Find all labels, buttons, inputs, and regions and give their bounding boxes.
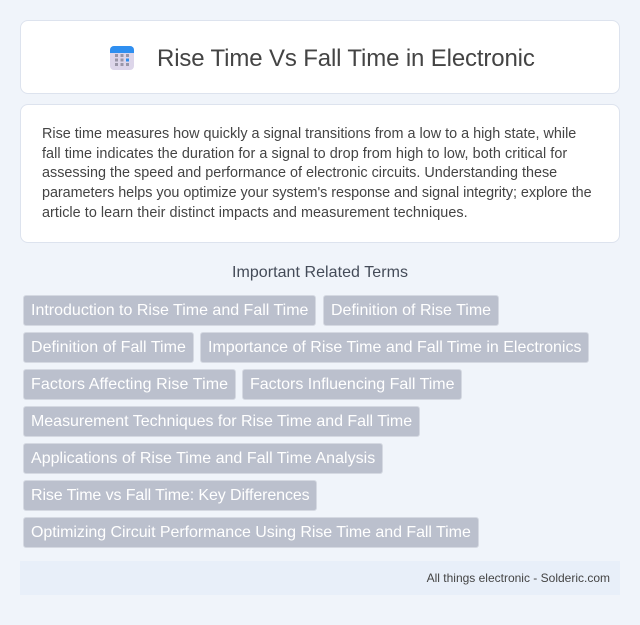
header panel (20, 20, 620, 94)
tag list (23, 295, 589, 548)
tag list: Importance of Rise Time and Fall Time in Electronics (208, 339, 581, 356)
footer bar (20, 561, 620, 595)
tag list: Factors Affecting Rise Time (31, 376, 228, 393)
intro text: fall time indicates the duration for a signal to drop from high to low, both critical for (42, 146, 567, 162)
intro text (42, 126, 592, 221)
intro text: assessing the speed and performance of electronic circuits. Understanding these (42, 165, 557, 181)
intro panel (20, 104, 620, 243)
footer bar: All things electronic - Solderic.com (427, 571, 610, 585)
tag list: Applications of Rise Time and Fall Time Analysis (31, 450, 375, 467)
tag list: Introduction to Rise Time and Fall Time (31, 302, 308, 319)
tag list: Rise Time vs Fall Time: Key Differences (31, 487, 310, 504)
tag list: Optimizing Circuit Performance Using Rise Time and Fall Time (31, 524, 471, 541)
tag list: Definition of Rise Time (331, 302, 491, 319)
icon: calendar (110, 46, 134, 70)
intro text: Rise time measures how quickly a signal transitions from a low to a high state, while (42, 126, 576, 142)
intro text: article to learn their distinct impacts and measurement techniques. (42, 205, 468, 221)
title: Rise Time Vs Fall Time in Electronic (157, 45, 535, 72)
tag list: Factors Influencing Fall Time (250, 376, 455, 393)
tag list: Definition of Fall Time (31, 339, 186, 356)
section heading: Important Related Terms (232, 264, 408, 281)
intro text: parameters helps you optimize your system's response and signal integrity; explore the (42, 185, 592, 201)
tag list: Measurement Techniques for Rise Time and Fall Time (31, 413, 412, 430)
